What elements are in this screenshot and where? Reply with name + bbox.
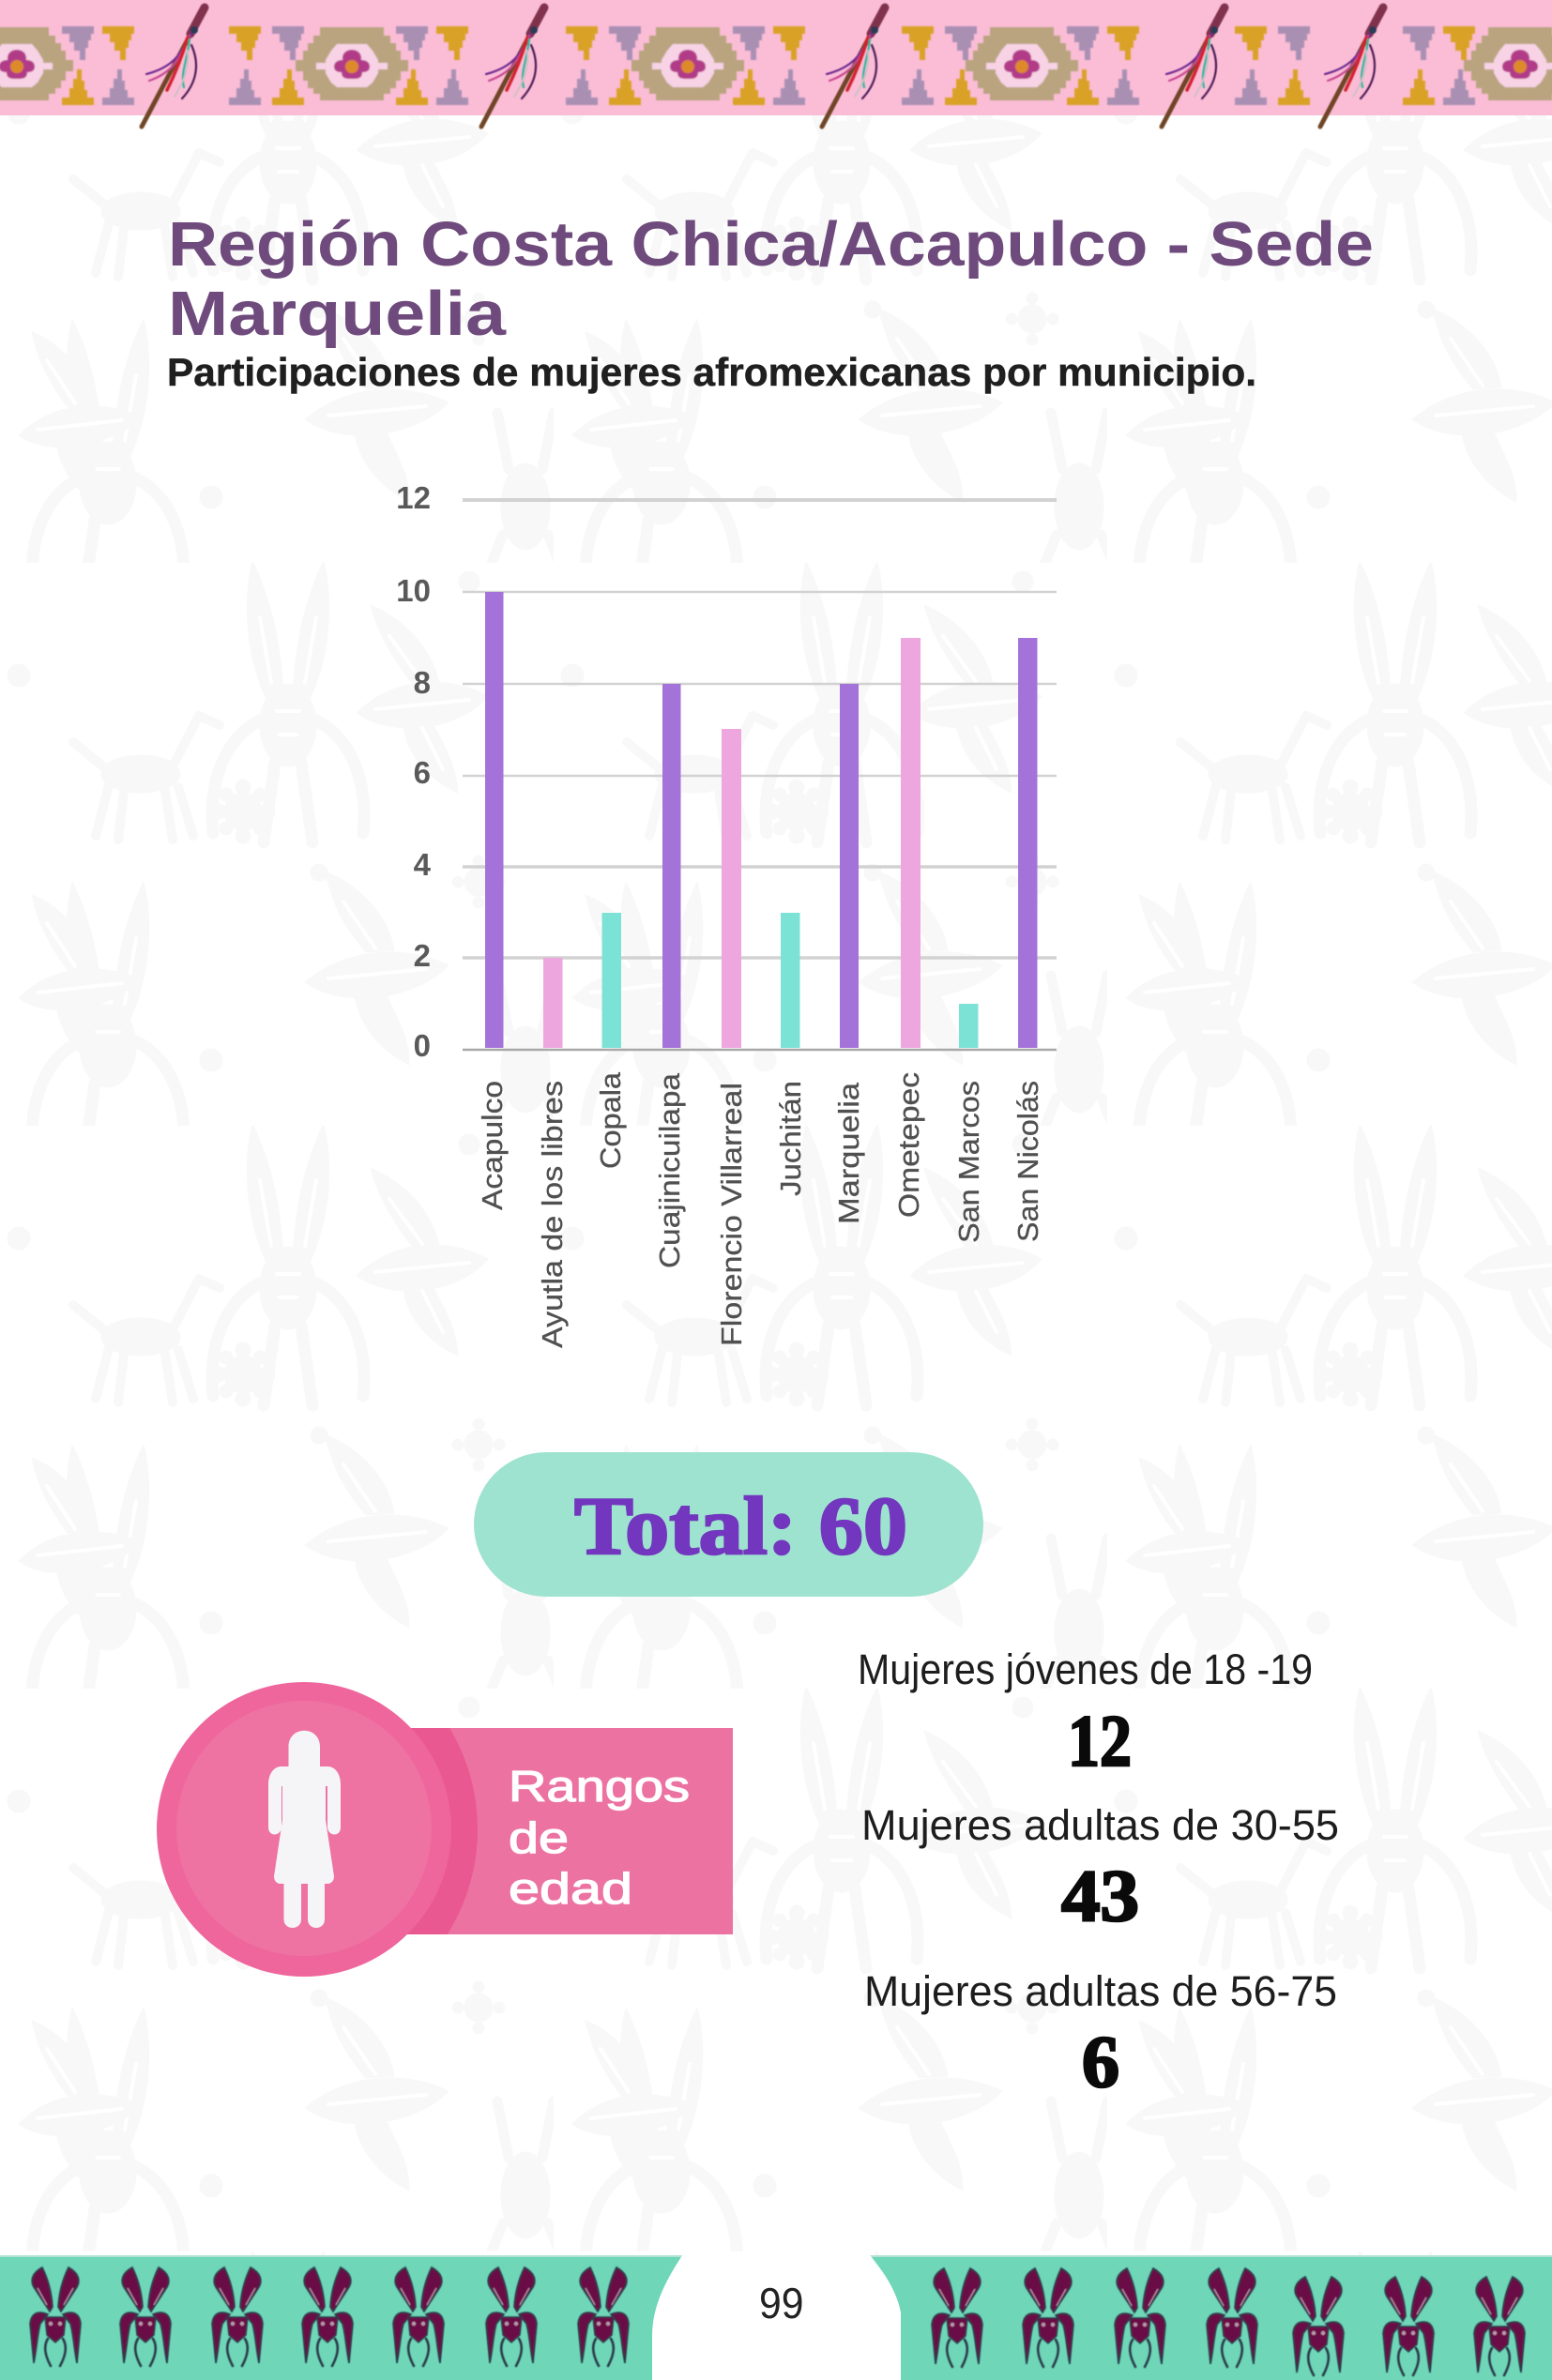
total pill: Total: 60 — [574, 1481, 907, 1572]
mask creature row — [30, 2267, 1525, 2375]
bottom teal band — [0, 2251, 1552, 2380]
badge label: de — [509, 1813, 569, 1862]
category labels: Florencio Villarreal — [715, 1083, 748, 1346]
badge label: Rangos — [509, 1762, 690, 1811]
bars — [485, 592, 1038, 1048]
category labels: Ayutla de los libres — [536, 1081, 569, 1348]
badge label: edad — [509, 1864, 632, 1913]
y axis labels: 6 — [414, 755, 431, 790]
age stat: 56-75 — [864, 1967, 1337, 2102]
category labels — [476, 1071, 1044, 1348]
page number tab — [652, 2251, 901, 2380]
title: Región Costa Chica/Acapulco - Sede — [168, 209, 1374, 280]
category labels: Copala — [594, 1071, 627, 1169]
bar chart: participaciones por municipio — [396, 480, 1057, 1348]
age stat: 56-75: 6 — [1082, 2021, 1119, 2102]
age stat: 18-19 — [858, 1645, 1313, 1781]
age stat: 18-19: Mujeres jóvenes de 18 -19 — [858, 1645, 1313, 1693]
category labels: San Nicolás — [1012, 1081, 1044, 1242]
feathered sticks — [142, 8, 1383, 127]
category labels: Acapulco — [476, 1081, 509, 1210]
y axis labels: 0 — [414, 1028, 431, 1063]
age stat: 30-55 — [861, 1801, 1339, 1936]
y axis labels: 8 — [414, 665, 431, 700]
age stat: 30-55: 43 — [1061, 1855, 1139, 1936]
subtitle: Participaciones de mujeres afromexicanas por municipio. — [167, 350, 1256, 394]
title: Marquelia — [168, 279, 507, 349]
category labels: Cuajinicuilapa — [653, 1072, 686, 1268]
total pill — [474, 1452, 983, 1597]
y axis labels — [396, 480, 432, 1063]
top decorative band — [0, 0, 1552, 127]
category labels: Juchitán — [774, 1081, 807, 1196]
woven diamond motifs — [0, 26, 1552, 105]
y axis labels: 12 — [396, 480, 431, 515]
age stat: 56-75: Mujeres adultas de 56-75 — [864, 1967, 1337, 2015]
category labels: Marquelia — [832, 1082, 865, 1224]
badge label — [509, 1762, 690, 1913]
y axis labels: 10 — [396, 573, 431, 608]
page number: 99 — [759, 2279, 803, 2327]
age stat: 30-55: Mujeres adultas de 30-55 — [861, 1801, 1339, 1849]
category labels: Ometepec — [892, 1072, 925, 1218]
category labels: San Marcos — [952, 1081, 985, 1243]
title — [168, 209, 1374, 349]
age stat: 18-19: 12 — [1068, 1700, 1132, 1781]
y axis labels: 4 — [414, 847, 432, 882]
icon: woman figure — [268, 1731, 341, 1928]
y axis labels: 2 — [414, 938, 431, 973]
age ranges badge — [157, 1682, 733, 1977]
gridlines — [463, 500, 1057, 1050]
